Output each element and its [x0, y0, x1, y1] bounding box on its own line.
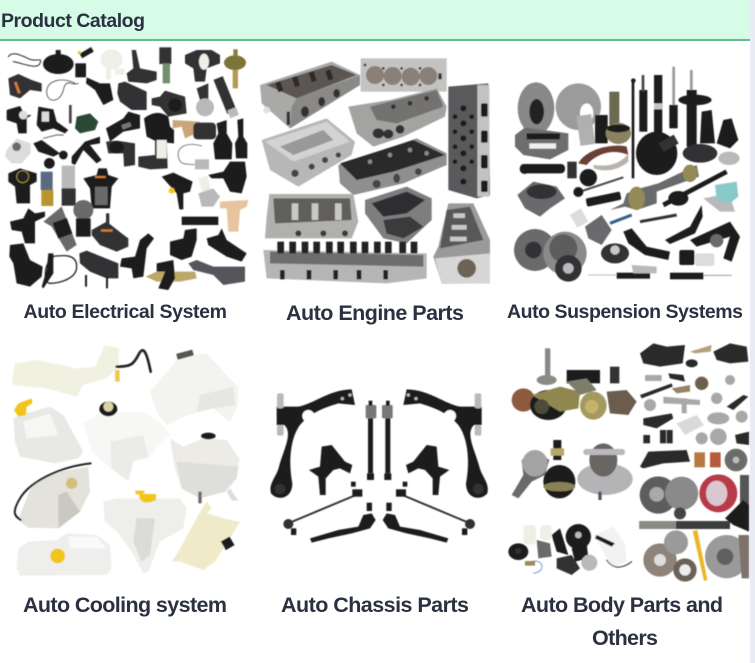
title: Product Catalog [1, 10, 145, 32]
panel: Auto Cooling system [12, 345, 240, 617]
caption: Auto Suspension Systems [507, 301, 743, 323]
caption: Auto Cooling system [23, 593, 227, 617]
panel: Auto Chassis Parts [270, 389, 488, 617]
panel: Auto Body Parts and Others [508, 343, 749, 650]
image: chassis control arms and links [270, 389, 488, 543]
panel: Auto Suspension Systems [507, 67, 743, 323]
caption line 2: Others [592, 626, 658, 650]
image: electrical sensors collage [5, 47, 248, 290]
panel: Auto Electrical System [5, 47, 248, 323]
caption: Auto Chassis Parts [281, 593, 469, 617]
caption: Auto Engine Parts [286, 301, 464, 325]
image: cylinder heads collage [260, 58, 490, 284]
caption: Auto Electrical System [24, 301, 227, 323]
caption line 1: Auto Body Parts and [521, 593, 723, 617]
image: assorted body parts collage [508, 343, 749, 582]
header bar [0, 0, 750, 41]
image: coolant reservoir tanks [12, 345, 240, 576]
panel: Auto Engine Parts [260, 58, 490, 325]
image: suspension parts collage [514, 67, 740, 282]
